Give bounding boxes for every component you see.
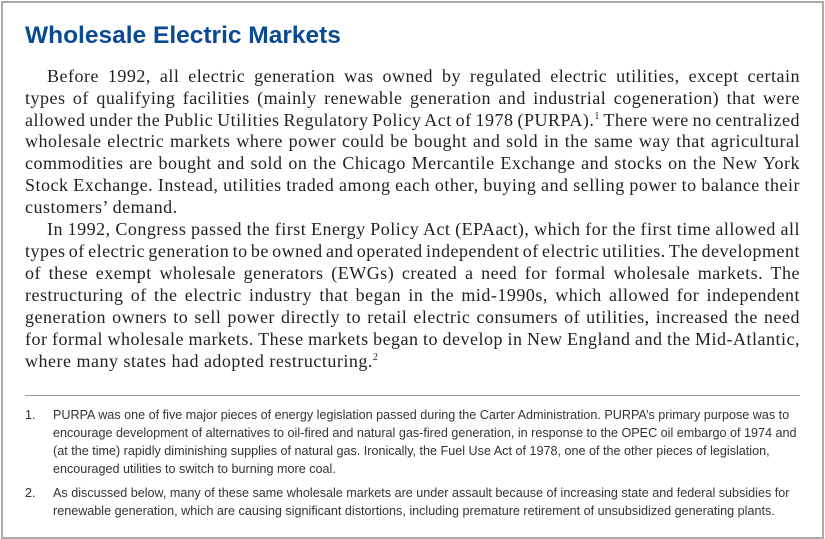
footnote 1: encourage development of alternatives to oil-fired and natural gas-fired generation, in response to the OPEC oil embargo of 1974 and	[53, 426, 796, 440]
text block: second paragraph: where many states had adopted restructuring.2	[25, 351, 378, 371]
text block: first paragraph: types of qualifying facilities (mainly renewable generation and industrial cogeneration) that were	[25, 88, 800, 108]
text block: second paragraph: generation owners to sell power directly to retail electric consumers of utilities, increased the need	[25, 307, 800, 327]
text block: second paragraph: In 1992, Congress passed the first Energy Policy Act (EPAact), which for the first time allowed all	[47, 219, 800, 239]
footnote 2: renewable generation, which are causing significant distortions, including premature retirement of unsubsidized generating plants.	[53, 504, 775, 518]
text block: second paragraph: for formal wholesale markets. These markets began to develop in New England and the Mid-Atlantic,	[25, 329, 800, 349]
text block: first paragraph: customers’ demand.	[25, 197, 178, 217]
footnote 1: 1.	[25, 408, 36, 422]
text block: first paragraph: allowed under the Public Utilities Regulatory Policy Act of 1978 (PURPA).1 There were no centralized	[25, 110, 800, 130]
footnote 1: encouraged utilities to switch to burning more coal.	[53, 462, 336, 476]
footnote 2	[25, 486, 790, 518]
text block: second paragraph	[25, 219, 800, 371]
text block: second paragraph: of these exempt wholesale generators (EWGs) created a need for formal wholesale markets. The	[25, 263, 800, 283]
text block: first paragraph	[25, 66, 800, 217]
footnote 2: 2.	[25, 486, 36, 500]
text block: second paragraph: restructuring of the electric industry that began in the mid-1990s, which allowed for independent	[25, 285, 800, 305]
title: Wholesale Electric Markets	[25, 22, 341, 49]
text block: first paragraph: Before 1992, all electric generation was owned by regulated electric utilities, except certain	[47, 66, 800, 86]
text block: first paragraph: Stock Exchange. Instead, utilities traded among each other, buying and selling power to balance their	[25, 175, 800, 195]
footnote 1: PURPA was one of five major pieces of energy legislation passed during the Carter Administration. PURPA’s primary purpose was to	[53, 408, 789, 422]
text block: first paragraph: wholesale electric markets where power could be bought and sold in the same way that agricultural	[25, 131, 800, 151]
text block: second paragraph: types of electric generation to be owned and operated independent of electric utilities. The development	[25, 241, 800, 261]
footnote 1	[25, 408, 796, 476]
footnote 2: As discussed below, many of these same wholesale markets are under assault because of increasing state and federal subsidies for	[53, 486, 789, 500]
footnote 1: (at the time) rapidly diminishing supplies of natural gas. Ironically, the Fuel Use Act of 1978, one of the other pieces of legislation,	[53, 444, 770, 458]
text block: first paragraph: commodities are bought and sold on the Chicago Mercantile Exchange and stocks on the New York	[25, 153, 800, 173]
